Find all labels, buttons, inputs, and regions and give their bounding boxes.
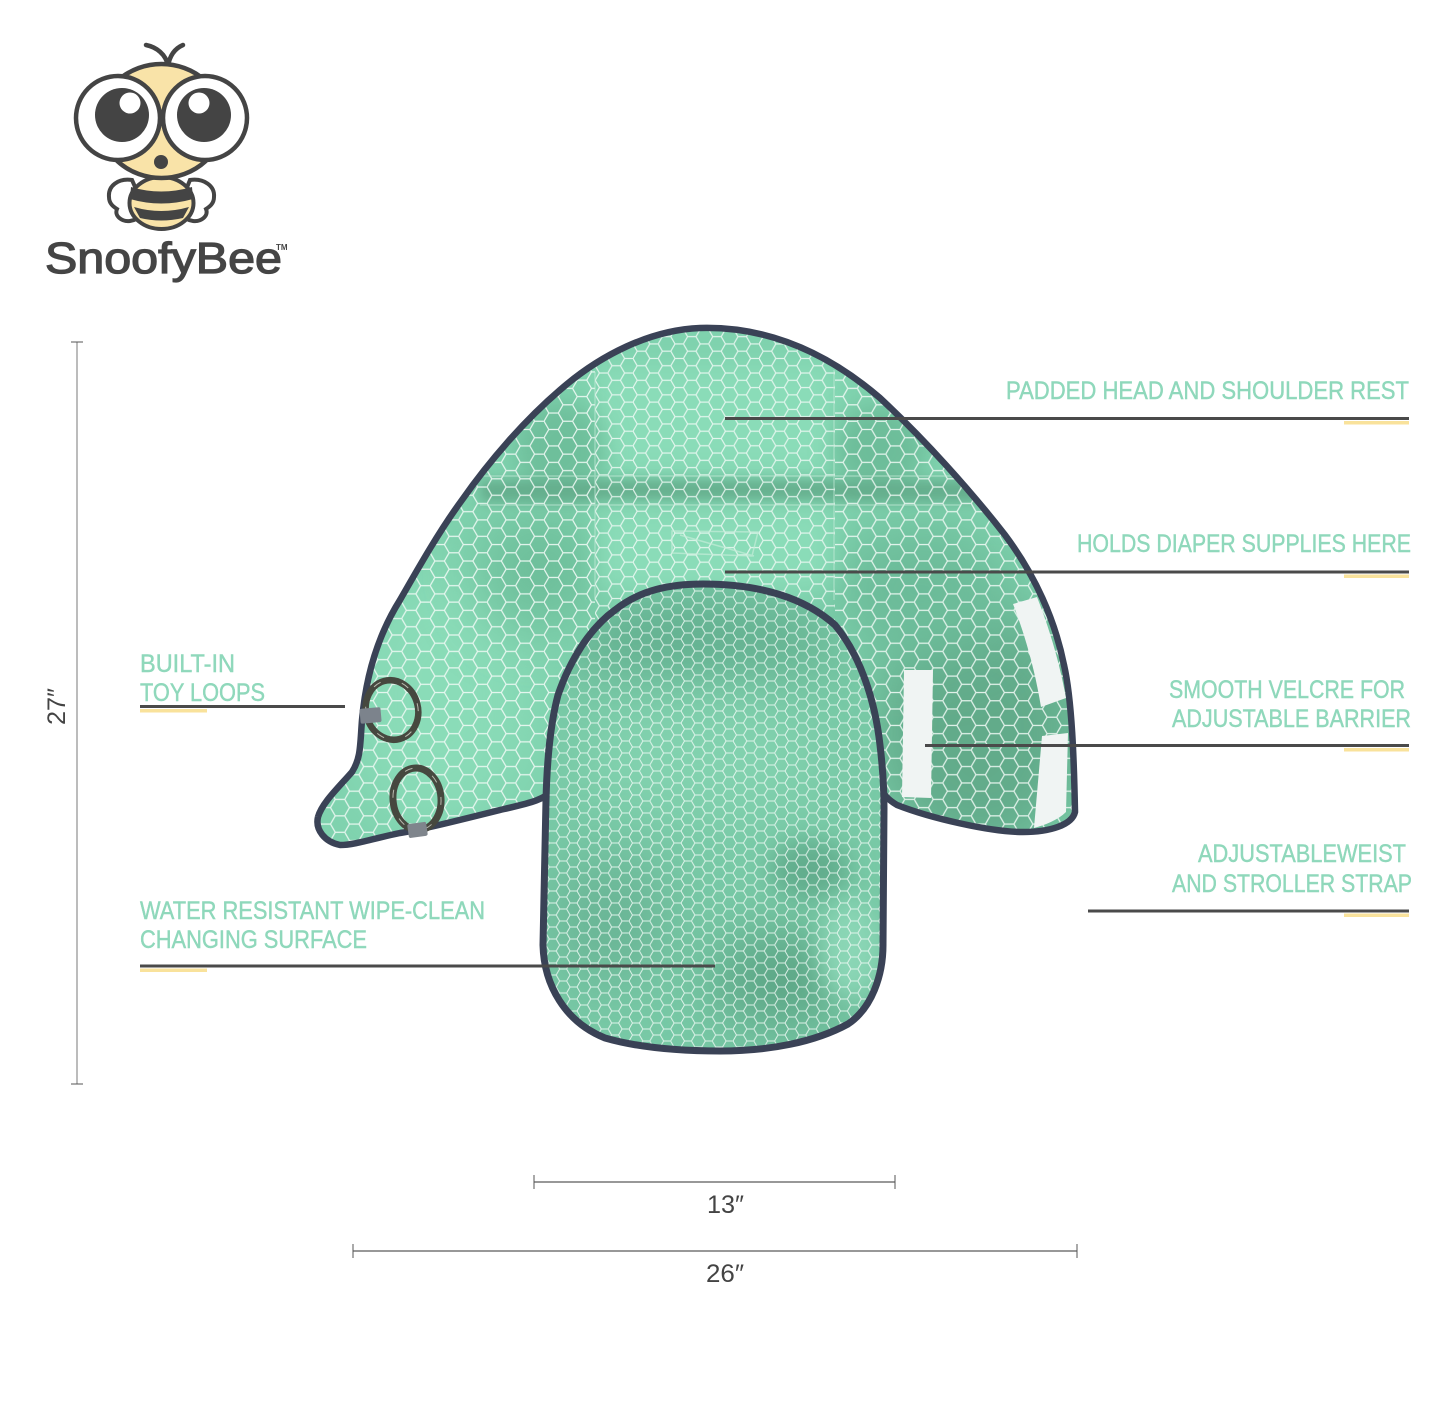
icon: right eye [163,76,247,160]
pad upper section [314,324,1078,848]
callout: smooth velcre: ADJUSTABLE BARRIER [1172,705,1411,733]
velcro strips [902,597,1068,828]
icon: bee mouth [154,155,168,169]
icon: bee body [130,177,194,229]
toy loop rings [359,674,444,838]
icon: bee antennae [146,45,183,66]
callout: smooth velcre: SMOOTH VELCRE FOR [1169,676,1405,704]
icon: bee wings [109,180,214,221]
logo: SnoofyBee [45,45,288,283]
callout: smooth velcre [925,676,1411,752]
callout: holds diaper supplies [725,530,1411,578]
logo wordmark: SnoofyBee [45,234,282,283]
pad lower mat [540,580,888,1054]
callout: water resistant surface [140,897,715,972]
trademark: TM [276,243,288,252]
icon: bee head [100,64,224,178]
callout: built-in toy loops [140,650,345,712]
callout: adjustable waist and stroller strap [1088,840,1412,917]
dimension: width 13 inches: 13″ [707,1191,744,1219]
icon: left eye [76,76,160,160]
callout: water resistant surface: CHANGING SURFACE [140,926,367,954]
callout: water resistant surface: WATER RESISTANT WIPE-CLEAN [140,897,485,925]
product: changing pad [314,324,1078,1054]
callout: built-in toy loops: TOY LOOPS [140,679,265,707]
dimension: width 26 inches: 26″ [706,1260,744,1288]
callout: padded head and shoulder rest [725,377,1409,424]
callout: adjustable waist and stroller strap: ADJUSTABLEWEIST [1198,840,1406,868]
dimension: height 27 inches: 27″ [43,688,71,725]
callout: built-in toy loops: BUILT-IN [140,650,235,678]
dimension: width 26 inches [353,1244,1077,1288]
diaper supply pocket [672,531,758,556]
dimension: width 13 inches [534,1175,895,1219]
dimension: height 27 inches [43,342,83,1084]
